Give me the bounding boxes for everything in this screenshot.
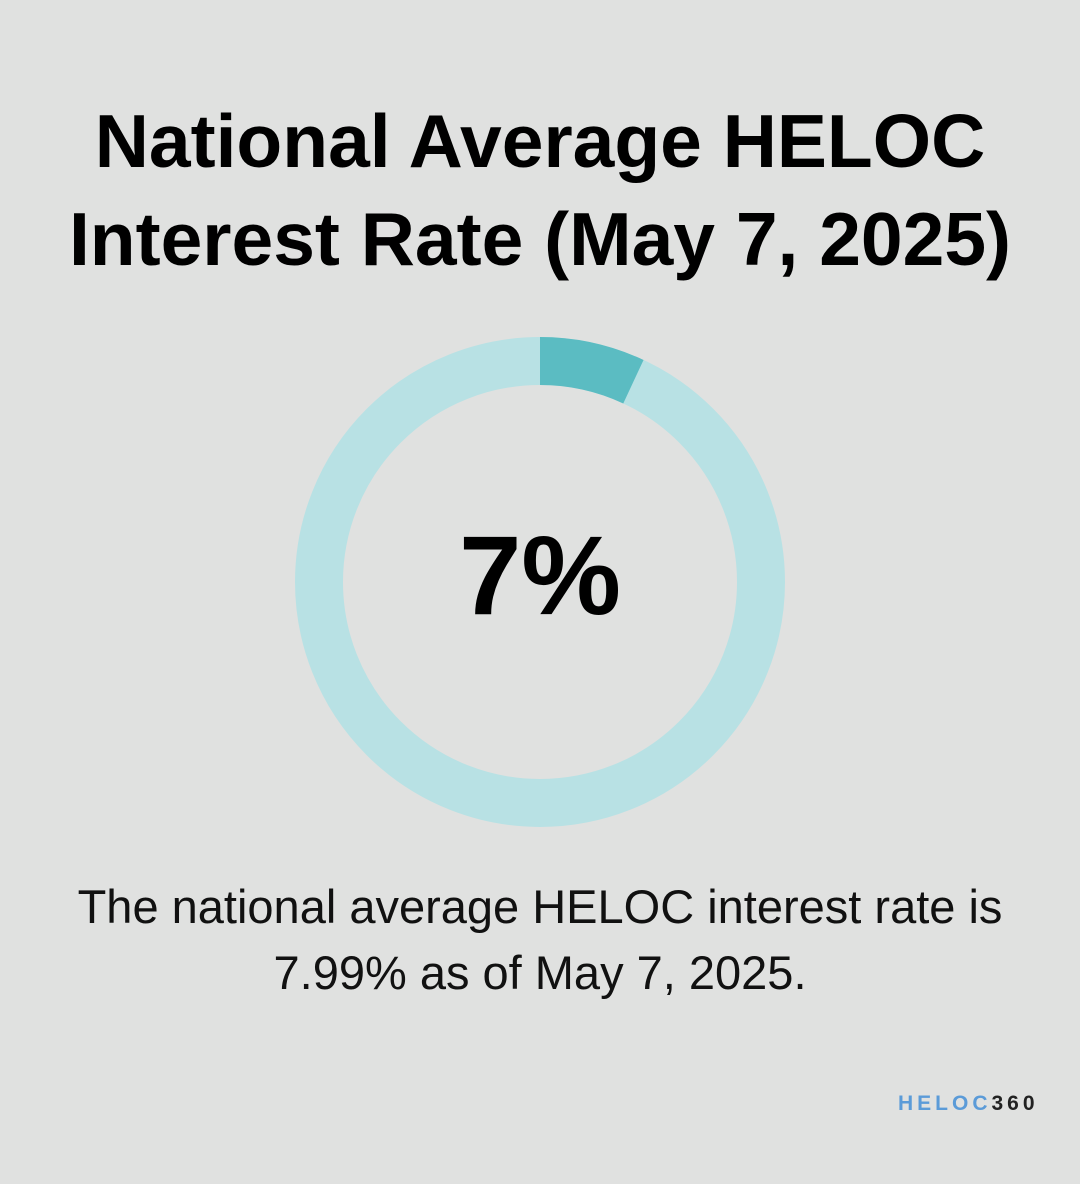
description text: The national average HELOC interest rate is — [78, 880, 1002, 933]
description text — [78, 880, 1002, 999]
description text: 7.99% as of May 7, 2025. — [274, 946, 806, 999]
donut chart: 7% — [459, 513, 621, 638]
title: Interest Rate (May 7, 2025) — [69, 197, 1011, 281]
title — [69, 99, 1011, 281]
title: National Average HELOC — [95, 99, 985, 183]
logo: HELOC360 — [898, 1092, 1039, 1115]
